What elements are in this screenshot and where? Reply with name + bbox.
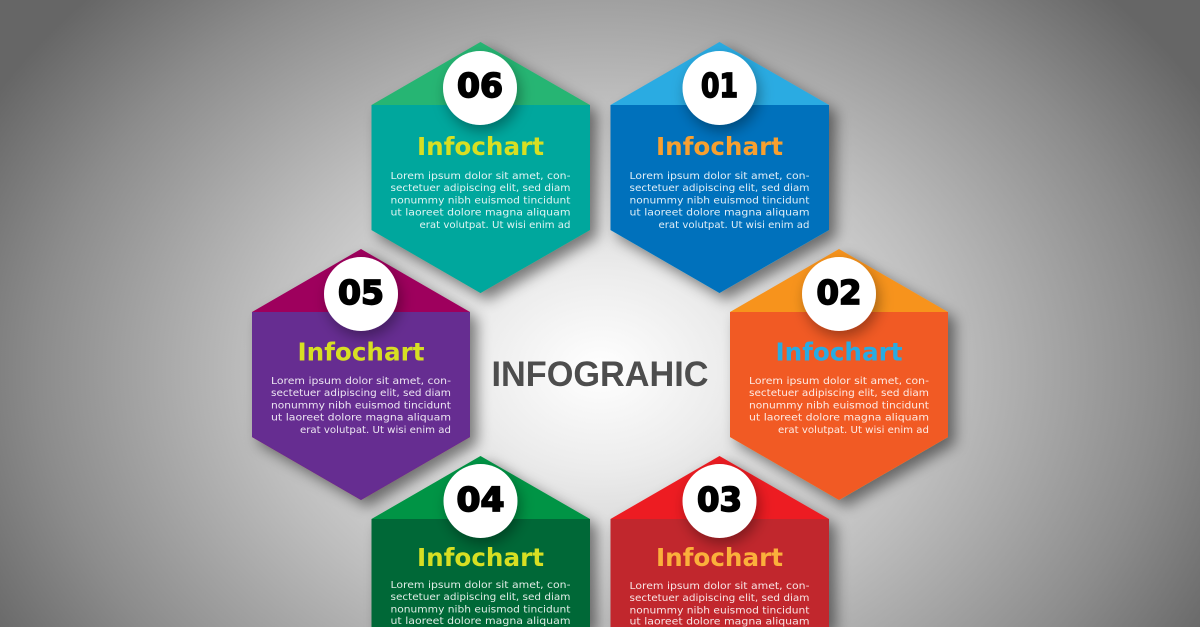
hexagon cap (610, 42, 829, 293)
body text (630, 581, 810, 627)
panel: 05 (252, 249, 470, 500)
hexagon cap (252, 249, 470, 500)
body text: nonummy nibh euismod tincidunt (630, 195, 810, 206)
heading: Infochart (776, 338, 903, 366)
hexagon cap (372, 42, 590, 293)
body text: sectetuer adipiscing elit, sed diam (271, 388, 451, 399)
body text: ut laoreet dolore magna aliquam (630, 208, 810, 219)
heading: Infochart (298, 338, 425, 366)
number: 06 (457, 66, 503, 105)
body text (630, 171, 810, 231)
body text: ut laoreet dolore magna aliquam (390, 208, 570, 219)
body text: sectetuer adipiscing elit, sed diam (390, 592, 570, 603)
body text (271, 376, 451, 436)
hexagon body (252, 312, 470, 500)
number badge (802, 257, 876, 331)
number badge (682, 51, 756, 125)
body text: sectetuer adipiscing elit, sed diam (749, 388, 929, 399)
panel: 01 (610, 42, 829, 293)
body text: nonummy nibh euismod tincidunt (271, 400, 451, 411)
number: 03 (697, 480, 742, 519)
number badge (682, 464, 756, 538)
body text: sectetuer adipiscing elit, sed diam (390, 183, 570, 194)
hexagon body (610, 105, 829, 293)
body text: ut laoreet dolore magna aliquam (390, 616, 570, 627)
panel: 04 (372, 456, 590, 627)
body text: nonummy nibh euismod tincidunt (630, 605, 810, 616)
body text: sectetuer adipiscing elit, sed diam (630, 183, 810, 194)
body text: nonummy nibh euismod tincidunt (390, 604, 571, 615)
heading: Infochart (656, 543, 783, 572)
body text: ut laoreet dolore magna aliquam (749, 413, 929, 424)
hexagon cap (610, 456, 829, 627)
hexagon cap (372, 456, 590, 627)
body text: ut laoreet dolore magna aliquam (271, 413, 451, 424)
heading: Infochart (656, 132, 783, 161)
number badge (324, 257, 398, 331)
panel: 06 (372, 42, 590, 293)
body text: Lorem ipsum dolor sit amet, con- (271, 376, 451, 387)
hexagon cap (730, 249, 948, 500)
panel: 03 (610, 456, 829, 627)
body text: Lorem ipsum dolor sit amet, con- (749, 376, 929, 387)
body text (749, 376, 929, 436)
body text: Lorem ipsum dolor sit amet, con- (630, 581, 810, 592)
hexagon body (372, 519, 590, 627)
hexagon body (372, 105, 590, 293)
number badge (443, 51, 517, 125)
number: 04 (456, 480, 504, 519)
hexagon body (610, 519, 829, 627)
number: 02 (816, 273, 862, 312)
body text: Lorem ipsum dolor sit amet, con- (390, 171, 571, 182)
panel: 02 (730, 249, 948, 500)
title: INFOGRAHIC (492, 355, 708, 394)
number: 05 (338, 273, 384, 312)
body text: sectetuer adipiscing elit, sed diam (630, 593, 810, 604)
hexagon body (730, 312, 948, 500)
body text: Lorem ipsum dolor sit amet, con- (630, 171, 810, 182)
body text: nonummy nibh euismod tincidunt (390, 195, 571, 206)
body text: erat volutpat. Ut wisi enim ad (778, 425, 929, 436)
body text: erat volutpat. Ut wisi enim ad (420, 220, 570, 231)
heading: Infochart (417, 132, 544, 161)
body text (390, 580, 571, 627)
body text: Lorem ipsum dolor sit amet, con- (390, 580, 571, 591)
heading: Infochart (417, 543, 544, 572)
body text: nonummy nibh euismod tincidunt (749, 400, 929, 411)
body text: erat volutpat. Ut wisi enim ad (300, 425, 451, 436)
number badge (444, 464, 518, 538)
number: 01 (701, 66, 738, 105)
body text: erat volutpat. Ut wisi enim ad (658, 220, 810, 231)
body text (390, 171, 571, 231)
